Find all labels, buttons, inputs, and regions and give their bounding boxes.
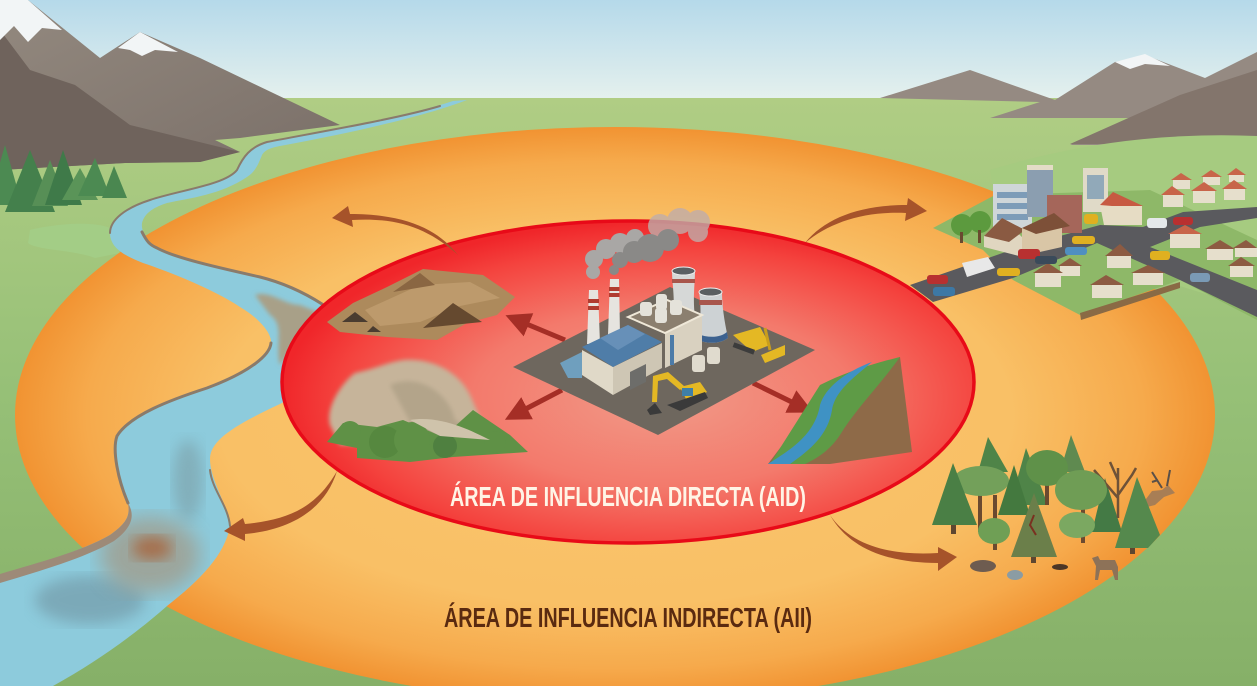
back conifers: [978, 435, 1122, 532]
arrow: to northwest: [332, 206, 458, 255]
chimney 2: [608, 279, 620, 335]
main building: [560, 325, 662, 395]
ground plate: [513, 287, 815, 435]
label: direct area: ÁREA DE INFLUENCIA DIRECTA (AID): [450, 481, 806, 512]
label: indirect area: ÁREA DE INFLUENCIA INDIRECTA (AII): [444, 602, 812, 633]
rooftop silos: [640, 294, 682, 323]
deer head: [1143, 485, 1175, 508]
city: [910, 165, 1257, 320]
mountains left: [0, 0, 340, 170]
cooling tower 1: [672, 267, 696, 325]
city base edge: [1080, 282, 1180, 320]
broad canopies: [953, 450, 1107, 544]
small houses: [1035, 175, 1257, 298]
second block: [628, 300, 702, 368]
tower blocks: [993, 165, 1108, 233]
dust and vegetation: [327, 360, 528, 462]
city base: [933, 190, 1257, 320]
main road: [910, 207, 1257, 317]
river: [0, 100, 467, 686]
arrow: to stream: [753, 383, 802, 407]
cooling tower 2: [698, 288, 728, 343]
meadow patch left: [28, 224, 120, 258]
arrow: to forest: [830, 515, 957, 571]
arrow: to soil: [517, 320, 565, 340]
red roof house: [1100, 192, 1143, 225]
standing deer: [1092, 556, 1118, 580]
antlers: [1152, 470, 1170, 488]
soil pile: [327, 269, 515, 340]
orange zone: AII: [15, 127, 1215, 686]
forest and wildlife: [932, 435, 1175, 580]
house large left: [984, 218, 1025, 257]
trees: [951, 211, 991, 243]
front conifers: [932, 463, 1160, 563]
resting animal: [970, 560, 996, 572]
dead tree: [1094, 462, 1136, 518]
house middle: [1022, 213, 1070, 256]
red arrows: [516, 320, 802, 414]
light hill right: [990, 135, 1257, 310]
pollution plume in river: [35, 294, 325, 624]
factory site: [513, 208, 815, 435]
burrow: [1052, 564, 1068, 570]
small house roofs: [1033, 168, 1257, 285]
mountains right: [880, 52, 1257, 145]
river banks: [110, 106, 440, 526]
stream slope: [768, 357, 912, 464]
smoke: [585, 208, 710, 279]
chimney 1: [587, 290, 600, 344]
excavator 1: [733, 327, 785, 363]
red zone: AID: [282, 221, 974, 543]
sky: [0, 0, 1257, 110]
excavator 2: [647, 372, 708, 415]
rock: [1007, 570, 1023, 580]
broad tree trunks: [978, 480, 1085, 550]
arrow: to city: [805, 198, 927, 243]
arrow: to dust: [516, 390, 562, 414]
lower tanks: [692, 347, 720, 372]
vehicles: [927, 214, 1210, 296]
lower river bank: [0, 503, 132, 583]
arrow: to river: [224, 471, 337, 541]
forest left: [0, 145, 127, 212]
